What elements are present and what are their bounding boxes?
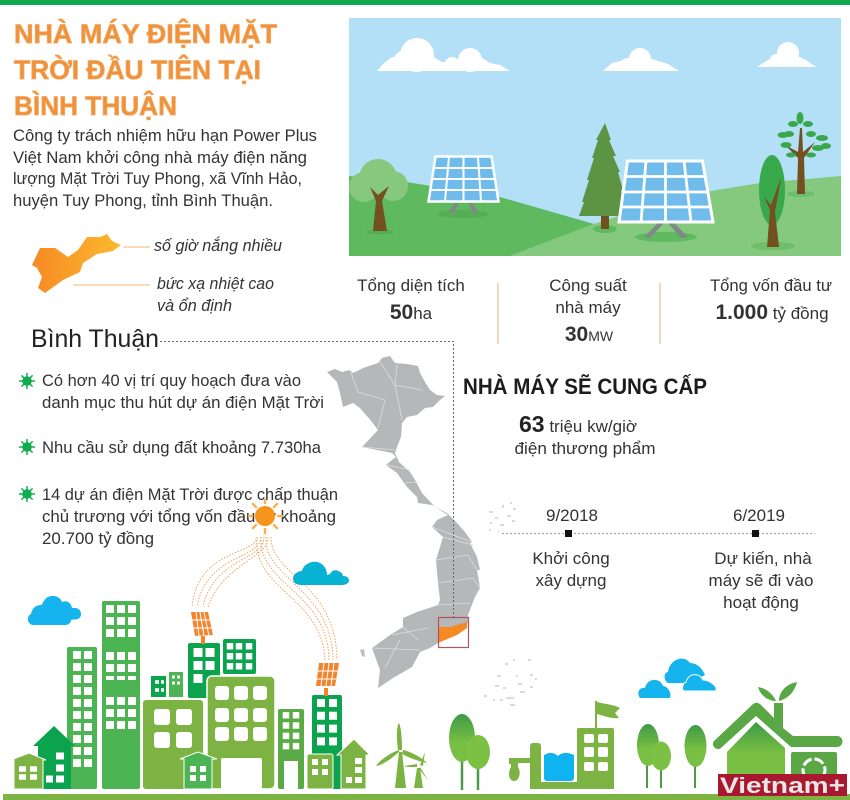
intro text block bbox=[13, 126, 317, 210]
icon: green sun bbox=[19, 486, 35, 502]
cloud blue bbox=[28, 596, 81, 625]
water factory bbox=[509, 701, 620, 789]
legend: Binh Thuan province: số giờ nắng nhiều bbox=[154, 236, 283, 255]
wind turbines bbox=[376, 723, 428, 788]
building tall 1 bbox=[67, 647, 97, 789]
intro text block: Việt Nam khởi công nhà máy điện năng bbox=[13, 148, 307, 167]
title: NHÀ MÁY ĐIỆN MẶT bbox=[14, 18, 277, 49]
bullet list bbox=[19, 371, 338, 548]
cloud blue right bbox=[638, 659, 716, 698]
dark building right bbox=[223, 639, 256, 674]
trees pair bbox=[449, 714, 490, 790]
milestone 9/2018 bbox=[532, 506, 610, 590]
oval tree bbox=[751, 155, 795, 250]
stat: total area: 50ha bbox=[390, 301, 433, 324]
trees group bbox=[637, 724, 706, 788]
stat: capacity bbox=[549, 276, 627, 346]
fir tree bbox=[579, 123, 625, 233]
house center bbox=[180, 752, 217, 789]
dark building with panel bbox=[188, 612, 220, 698]
house left bbox=[11, 753, 46, 789]
city buildings bbox=[11, 601, 370, 789]
icon: sun bbox=[249, 500, 282, 533]
divider bbox=[659, 283, 661, 344]
title: BÌNH THUẬN bbox=[14, 90, 177, 121]
olive building left bbox=[143, 700, 203, 789]
small buildings bbox=[151, 672, 183, 697]
stat: total area bbox=[357, 276, 465, 324]
bullet list: 14 dự án điện Mặt Trời được chấp thuận bbox=[42, 485, 338, 504]
bullet list: Nhu cầu sử dụng đất khoảng 7.730ha bbox=[42, 438, 322, 457]
stat: total investment: 1.000 tỷ đồng bbox=[715, 301, 829, 324]
olive small building bbox=[307, 754, 333, 789]
milestone 6/2019: hoạt động bbox=[723, 593, 799, 612]
stat: capacity: 30MW bbox=[565, 323, 614, 346]
supply figure: 63 triệu kw/giờ bbox=[519, 411, 637, 437]
bullet list: Có hơn 40 vị trí quy hoạch đưa vào bbox=[42, 371, 301, 390]
legend: Binh Thuan province bbox=[32, 234, 283, 315]
stat: total investment: Tổng vốn đầu tư bbox=[710, 276, 832, 295]
milestone 6/2019: Dự kiến, nhà bbox=[714, 549, 812, 568]
milestone 6/2019: máy sẽ đi vào bbox=[709, 571, 813, 590]
legend: Binh Thuan province: bức xạ nhiệt cao bbox=[157, 274, 274, 293]
legend: Binh Thuan province: và ổn định bbox=[157, 296, 232, 315]
map of Vietnam bbox=[327, 356, 480, 688]
solar panel small bbox=[428, 156, 498, 218]
solar panel large bbox=[619, 161, 713, 242]
recycling symbol bbox=[803, 759, 825, 781]
top green bar bbox=[0, 0, 850, 5]
heading: plant will supply: NHÀ MÁY SẼ CUNG CẤP bbox=[463, 374, 707, 399]
milestone 9/2018: xây dựng bbox=[536, 571, 606, 590]
illustration: solar farm landscape bbox=[349, 18, 841, 256]
eco house bbox=[713, 682, 842, 782]
stat: capacity: Công suất bbox=[549, 276, 627, 295]
bullet list: chủ trương với tổng vốn đầu tư khoảng bbox=[42, 507, 336, 526]
supply figure bbox=[514, 411, 656, 458]
logo: Vietnam+: Vietnam+ bbox=[720, 773, 845, 798]
milestone 6/2019 bbox=[709, 506, 813, 612]
Binh Thuan highlighted bbox=[438, 622, 467, 643]
building tall 2 bbox=[102, 601, 140, 789]
heading: Binh Thuan: Bình Thuận bbox=[31, 325, 159, 353]
icon: province shape bbox=[32, 234, 121, 293]
stat: total investment bbox=[710, 276, 832, 324]
divider bbox=[497, 283, 499, 344]
hills bbox=[349, 176, 594, 256]
bullet list: danh mục thu hút dự án điện Mặt Trời bbox=[42, 393, 324, 412]
cloud teal bbox=[293, 562, 349, 585]
highlight box bbox=[438, 618, 468, 648]
supply figure: điện thương phẩm bbox=[514, 439, 656, 458]
island bbox=[360, 649, 365, 657]
icon: green sun bbox=[19, 439, 35, 455]
bullet list: 20.700 tỷ đồng bbox=[42, 529, 154, 548]
olive building center bbox=[207, 676, 275, 789]
timeline bbox=[502, 506, 815, 612]
islands: Truong Sa bbox=[484, 660, 537, 705]
milestone 9/2018: 9/2018 bbox=[546, 506, 598, 525]
intro text block: Công ty trách nhiệm hữu hạn Power Plus bbox=[13, 126, 317, 145]
leader line from heading to map bbox=[160, 342, 454, 620]
stat: total area: Tổng diện tích bbox=[357, 276, 465, 295]
milestone 9/2018: Khởi công bbox=[532, 549, 610, 568]
house dark left bbox=[33, 726, 75, 789]
milestone 6/2019: 6/2019 bbox=[733, 506, 785, 525]
islands: Hoang Sa bbox=[489, 503, 516, 532]
intro text block: huyện Tuy Phong, tỉnh Bình Thuận. bbox=[13, 191, 273, 210]
dark building with right panel bbox=[312, 663, 342, 789]
house roof and body bbox=[713, 703, 842, 749]
solar energy beams bbox=[192, 537, 337, 660]
green building bbox=[278, 709, 304, 789]
leafy tree bbox=[778, 112, 831, 197]
stat: capacity: nhà máy bbox=[555, 298, 621, 317]
title bbox=[14, 18, 277, 121]
clouds bbox=[377, 38, 816, 72]
tree left bbox=[349, 159, 408, 234]
icon: green sun bbox=[19, 373, 35, 389]
intro text block: lượng Mặt Trời Tuy Phong, xã Vĩnh Hảo, bbox=[13, 169, 302, 188]
ground bar bbox=[3, 794, 850, 800]
title: TRỜI ĐẦU TIÊN TẠI bbox=[14, 54, 261, 85]
leaves bbox=[758, 682, 797, 701]
house right bbox=[337, 739, 370, 789]
